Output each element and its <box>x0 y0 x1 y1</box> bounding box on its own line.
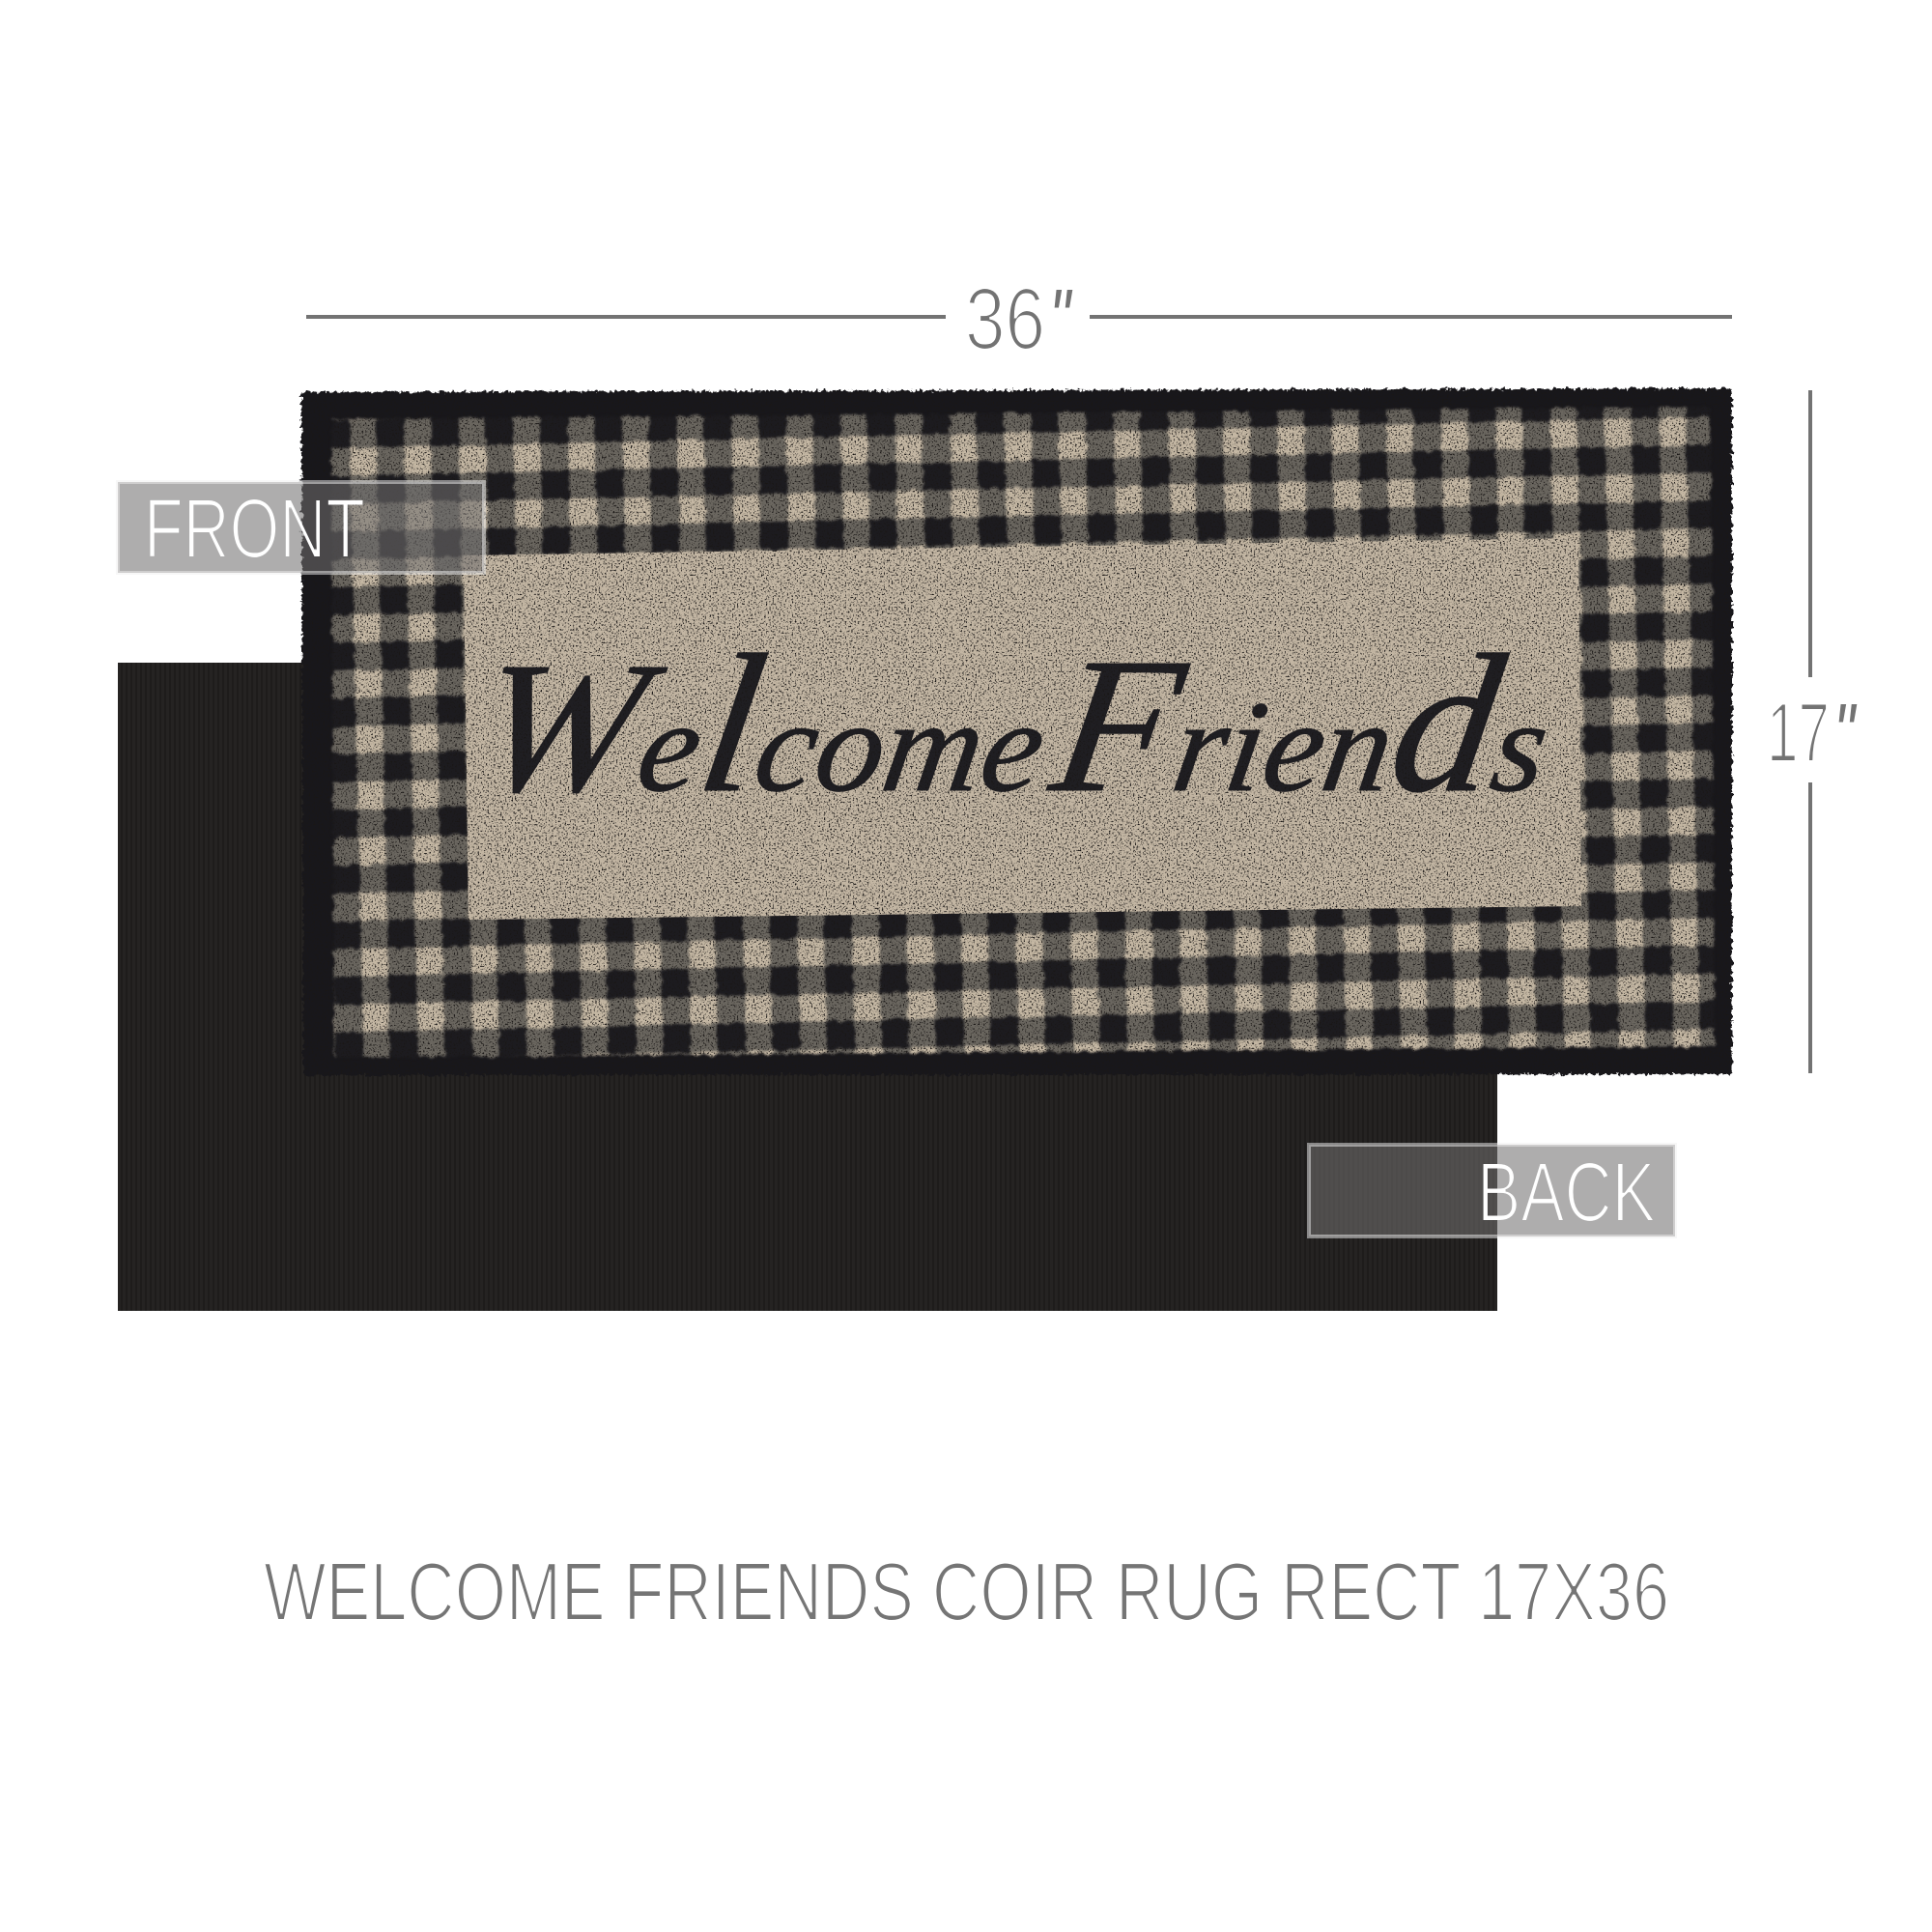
centre coir panel <box>464 538 1581 920</box>
script text: Friends: Friends <box>1038 613 1568 834</box>
script text: Welcome: Welcome <box>465 613 1065 834</box>
label: BACK: BACK <box>1477 1146 1656 1239</box>
coir fibre grain <box>295 384 1739 1080</box>
width dimension: 36 inches: " <box>1049 273 1073 365</box>
gingham check band <box>331 407 1715 1058</box>
height dimension: 17 inches <box>1767 390 1858 1073</box>
rug dark outer border <box>301 388 1732 1075</box>
label: FRONT: FRONT <box>144 482 365 576</box>
height dimension: 17 inches: 17 <box>1767 687 1830 780</box>
front of rug <box>295 384 1739 1080</box>
height dimension: 17 inches: " <box>1833 688 1858 780</box>
back of rug <box>118 663 1497 1311</box>
label: BACK <box>1309 1145 1675 1239</box>
width dimension: 36 inches: 36 <box>965 271 1045 368</box>
width dimension: 36 inches <box>306 271 1732 368</box>
